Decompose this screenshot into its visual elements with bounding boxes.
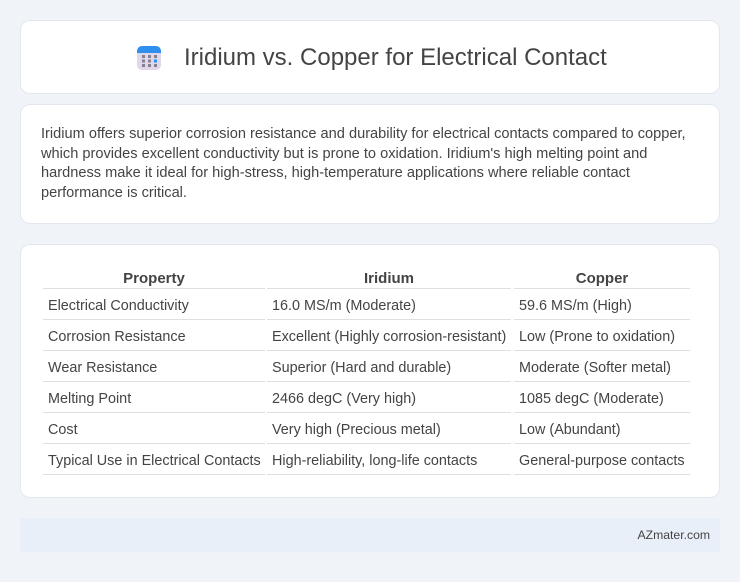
row: electrical conductivity xyxy=(48,298,632,314)
row: wear resistance: Moderate (Softer metal) xyxy=(519,360,671,376)
row: electrical conductivity: 59.6 MS/m (High) xyxy=(519,298,632,314)
column headings: Copper xyxy=(576,270,628,287)
row: typical use: General-purpose contacts xyxy=(519,453,685,469)
row: typical use: Typical Use in Electrical Contacts xyxy=(48,453,261,469)
icon: calendar xyxy=(137,46,161,70)
summary panel xyxy=(20,104,720,224)
row: melting point: Melting Point xyxy=(48,391,131,407)
summary text: which provides excellent conductivity but is prone to oxidation. Iridium's high melting point and xyxy=(41,146,647,162)
title: Iridium vs. Copper for Electrical Contact xyxy=(184,44,607,71)
summary text: hardness make it ideal for high-stress, high-temperature applications where reliable contact xyxy=(41,165,630,181)
row: corrosion resistance: Corrosion Resistance xyxy=(48,329,186,345)
column headings: Iridium xyxy=(364,270,414,287)
row: cost: Cost xyxy=(48,422,78,438)
row: melting point: 2466 degC (Very high) xyxy=(272,391,416,407)
column headings xyxy=(123,270,628,287)
row: typical use xyxy=(48,453,685,469)
row: corrosion resistance xyxy=(48,329,675,345)
table panel xyxy=(20,244,720,498)
footer credit: AZmater.com xyxy=(638,528,710,542)
row: wear resistance: Superior (Hard and durable) xyxy=(272,360,451,376)
header panel xyxy=(20,20,720,94)
row: electrical conductivity: Electrical Conductivity xyxy=(48,298,189,314)
footer bar xyxy=(20,518,720,552)
row: wear resistance: Wear Resistance xyxy=(48,360,157,376)
row: cost xyxy=(48,422,621,438)
row: corrosion resistance: Low (Prone to oxidation) xyxy=(519,329,675,345)
row: electrical conductivity: 16.0 MS/m (Moderate) xyxy=(272,298,416,314)
summary text: performance is critical. xyxy=(41,185,187,201)
row: melting point: 1085 degC (Moderate) xyxy=(519,391,664,407)
row: wear resistance xyxy=(48,360,671,376)
row: corrosion resistance: Excellent (Highly corrosion-resistant) xyxy=(272,329,506,345)
summary text: Iridium offers superior corrosion resistance and durability for electrical contacts compared to copper, xyxy=(41,126,686,142)
summary text xyxy=(41,126,686,201)
column headings: Property xyxy=(123,270,185,287)
row: cost: Low (Abundant) xyxy=(519,422,621,438)
comparison table xyxy=(43,270,690,475)
row: melting point xyxy=(48,391,664,407)
row: typical use: High-reliability, long-life contacts xyxy=(272,453,477,469)
row: cost: Very high (Precious metal) xyxy=(272,422,441,438)
